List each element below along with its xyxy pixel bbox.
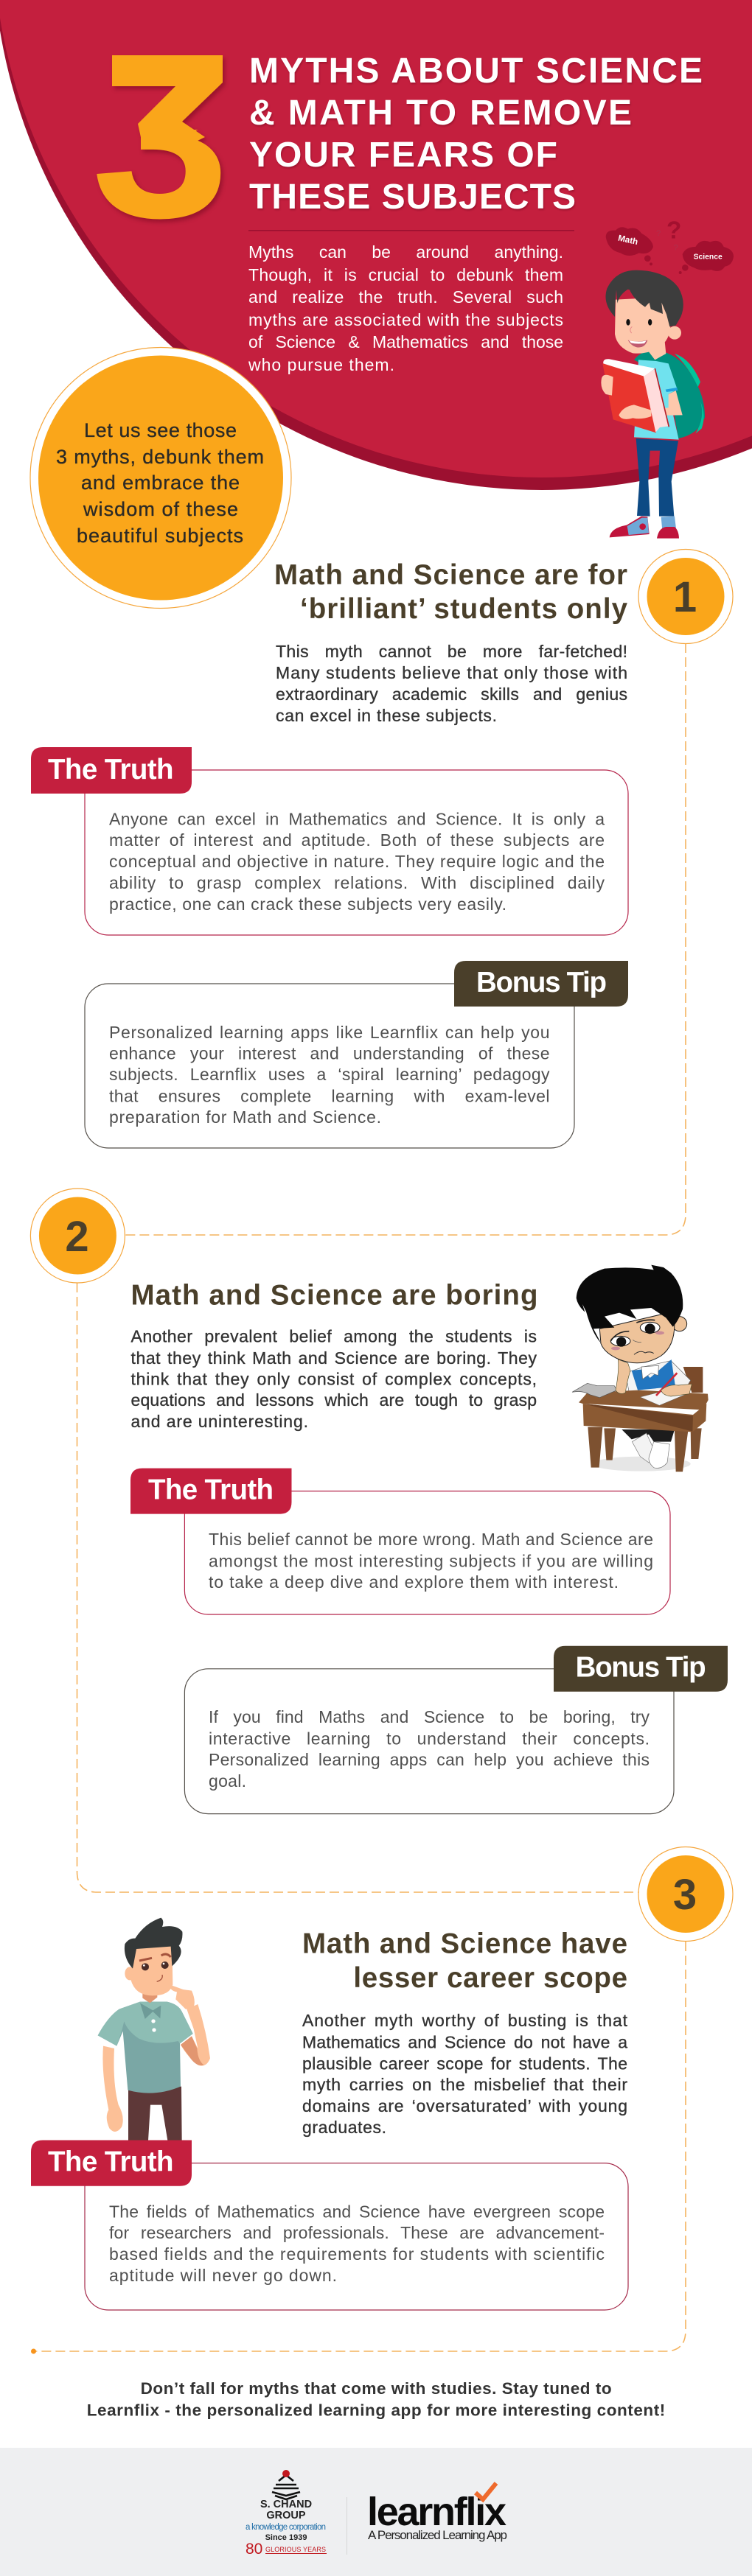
text: bonus 1: Personalized learning apps like Learnflix can help you <box>109 1023 550 1042</box>
heading: myth 2: Math and Science are boring <box>131 1279 538 1312</box>
backpack <box>634 350 705 438</box>
text: bonus 1: that ensures complete learning with exam-level <box>109 1086 550 1105</box>
text: truth 3: aptitude will never go down. <box>109 2266 337 2285</box>
t-shirt <box>634 360 679 440</box>
big number 3 <box>97 55 227 224</box>
heading: myth 3: lesser career scope <box>353 1962 627 1994</box>
text: truth 2: amongst the most interesting subjects if you are willing <box>209 1551 653 1570</box>
book <box>602 363 656 433</box>
closing text <box>87 2379 665 2419</box>
text: bonus 1: subjects. Learnflix uses a ‘spiral learning’ pedagogy <box>109 1065 550 1084</box>
text: bonus 2: Personalized learning apps can help you achieve this <box>209 1750 650 1769</box>
intro paragraph: myths are associated with the subjects <box>248 310 563 329</box>
tag: the truth: The Truth <box>48 2146 174 2178</box>
heading: myth 3 <box>302 1928 627 1994</box>
title: & MATH TO REMOVE <box>249 94 632 133</box>
paragraph: myth 2: think that they only consist of complex concepts, <box>131 1370 537 1389</box>
face details <box>626 319 630 326</box>
text: truth 2 <box>209 1530 653 1592</box>
question marks: ? <box>656 229 661 238</box>
jeans <box>636 438 678 517</box>
logo: S. Chand Group: 80 <box>246 2541 262 2558</box>
badge: number 2: 2 <box>65 1213 89 1261</box>
tag: bonus tip: Bonus Tip <box>476 967 607 998</box>
text: truth 1: matter of interest and aptitude. Both of these subjects are <box>109 830 605 850</box>
logo: learnflix: A Personalized Learning App <box>368 2528 507 2542</box>
text: truth 3: for researchers and professionals. These are advancement- <box>109 2223 605 2242</box>
tag: the truth <box>130 1469 292 1514</box>
head <box>672 1317 687 1331</box>
text: bonus 1: enhance your interest and understanding of these <box>109 1043 550 1063</box>
tag: bonus tip: Bonus Tip <box>576 1652 706 1684</box>
neck <box>142 1992 157 2003</box>
logo: learnflix: learnflix <box>367 2490 506 2534</box>
paragraph: myth 1: This myth cannot be more far-fetched! <box>276 642 627 661</box>
legs and socks <box>622 1429 675 1442</box>
thought cloud: Math <box>606 227 653 265</box>
paragraph: myth 3: Another myth worthy of busting is that <box>302 2011 628 2030</box>
text: truth 1: Anyone can excel in Mathematics and Science. It is only a <box>109 809 605 828</box>
icon: book stack <box>272 2470 300 2499</box>
ear and face <box>668 326 681 340</box>
hair <box>605 270 683 326</box>
hands <box>601 375 613 396</box>
text: truth 1 <box>109 809 605 914</box>
chair <box>683 1367 703 1393</box>
paragraph: myth 2 <box>131 1327 537 1431</box>
paragraph: myth 3: domains are ‘oversaturated’ with young <box>302 2096 627 2115</box>
eyes and brows <box>142 1963 149 1970</box>
tag: bonus tip <box>554 1646 728 1692</box>
callout: orange circle: Let us see those <box>84 419 237 441</box>
hero red circle <box>0 0 752 490</box>
hand <box>170 1984 195 2009</box>
illustration: bored boy at desk <box>572 1265 709 1471</box>
text: bonus 2: If you find Maths and Science to be boring, try <box>209 1707 650 1726</box>
callout: orange circle: and embrace the <box>81 472 240 494</box>
hair <box>577 1265 683 1343</box>
logo: S. Chand Group: GLORIOUS YEARS <box>265 2546 326 2553</box>
badge: number 3: 3 <box>673 1871 697 1919</box>
hair <box>125 1918 182 1969</box>
panel: bonus tip 1 <box>85 961 628 1148</box>
title: YOUR FEARS OF <box>249 136 557 175</box>
intro paragraph: Though, it is crucial to debunk them <box>248 265 563 284</box>
question marks: ? <box>666 217 681 244</box>
text: bonus 2 <box>209 1707 650 1791</box>
paragraph: myth 3: Mathematics and Science do not have a <box>302 2032 627 2051</box>
paragraph: myth 3: graduates. <box>302 2118 386 2137</box>
text: truth 3: The fields of Mathematics and Science have evergreen scope <box>109 2202 605 2221</box>
panel: the truth 3 <box>31 2140 628 2310</box>
paragraph: myth 2: and are uninteresting. <box>131 1412 308 1431</box>
callout: orange circle <box>30 348 291 609</box>
big number 3: 3 <box>91 10 229 265</box>
tag: bonus tip <box>454 961 628 1007</box>
intro paragraph: of Science & Mathematics and those <box>248 332 563 351</box>
arm under chin <box>616 1359 630 1393</box>
paragraph: myth 1 <box>276 642 627 725</box>
text: truth 3 <box>109 2202 605 2285</box>
ear <box>125 1967 135 1980</box>
paragraph: myth 3: myth carries on the misbelief that their <box>302 2075 627 2094</box>
text: truth 1: practice, one can crack these subjects very easily. <box>109 895 506 914</box>
closing text: Don’t fall for myths that come with studies. Stay tuned to <box>141 2379 612 2398</box>
text: truth 2: to take a deep dive and explore them with interest. <box>209 1572 619 1592</box>
paragraph: myth 1: can excel in these subjects. <box>276 706 497 725</box>
trousers <box>128 2087 182 2141</box>
title: THESE SUBJECTS <box>249 178 576 217</box>
paragraph: myth 1: Many students believe that only those with <box>276 663 627 682</box>
badge: number 1: 1 <box>673 573 697 621</box>
footer band <box>0 2448 752 2576</box>
thought cloud: Science <box>679 241 734 274</box>
paper and pencil <box>640 1391 685 1405</box>
paragraph: myth 3: plausible career scope for students. The <box>302 2054 627 2073</box>
connector: dashed timeline <box>31 643 686 2353</box>
paragraph: myth 2: Another prevalent belief among the students is <box>131 1327 537 1346</box>
intro paragraph: who pursue them. <box>248 355 394 374</box>
left arm <box>102 2046 123 2132</box>
callout: orange circle: beautiful subjects <box>77 525 243 547</box>
text: bonus 1 <box>109 1023 550 1127</box>
text: truth 1: conceptual and objective in nature. They require logic and the <box>109 852 605 871</box>
thought cloud: Science: Science <box>694 253 723 261</box>
intro paragraph <box>248 242 563 374</box>
logo: S. Chand Group <box>246 2470 327 2558</box>
logo: S. Chand Group: a knowledge corporation <box>246 2523 326 2532</box>
arm <box>650 391 683 416</box>
text: bonus 2: interactive learning to understand their concepts. <box>209 1729 650 1748</box>
tag: the truth: The Truth <box>48 754 174 785</box>
panel: the truth 2 <box>130 1469 670 1614</box>
paragraph: myth 1: extraordinary academic skills and genius <box>276 685 627 704</box>
torso <box>625 1361 691 1393</box>
paragraph: myth 2: that they think Math and Science are boring. They <box>131 1348 537 1368</box>
text: bonus 1: preparation for Math and Science. <box>109 1107 381 1127</box>
desk <box>579 1390 709 1410</box>
heading: myth 1: Math and Science are for <box>274 559 627 591</box>
badge: number 2 <box>30 1189 125 1283</box>
thought cloud: Math: Math <box>617 234 638 247</box>
shirt <box>98 2002 193 2093</box>
logo: S. Chand Group: S. CHAND <box>260 2499 312 2510</box>
paragraph: myth 2: equations and lessons which are tough to grasp <box>131 1390 537 1410</box>
badge: number 3 <box>638 1847 733 1941</box>
title: MYTHS ABOUT SCIENCE <box>249 52 703 91</box>
paragraph: myth 3 <box>302 2011 628 2137</box>
panel: bonus tip 2 <box>184 1646 728 1814</box>
text: truth 1: ability to grasp complex relations. With disciplined daily <box>109 873 605 892</box>
illustration: thinking man <box>98 1918 210 2141</box>
face <box>130 1945 173 1995</box>
floor shadow <box>592 1457 691 1471</box>
right arm <box>181 2004 210 2066</box>
illustration: boy with book and backpack <box>601 217 734 539</box>
text: truth 2: This belief cannot be more wrong. Math and Science are <box>209 1530 653 1549</box>
shoes <box>610 517 650 537</box>
logo: S. Chand Group: Since 1939 <box>265 2533 307 2542</box>
tag: the truth <box>31 747 192 794</box>
badge: number 1 <box>638 550 733 644</box>
text: bonus 2: goal. <box>209 1771 246 1791</box>
title <box>249 52 703 217</box>
eyes <box>640 1322 660 1333</box>
closing text: Learnflix - the personalized learning app for more interesting content! <box>87 2401 665 2419</box>
question marks: ? <box>673 243 678 252</box>
heading: myth 3: Math and Science have <box>302 1928 627 1960</box>
intro paragraph: Myths can be around anything. <box>248 242 563 262</box>
tag: the truth: The Truth <box>148 1474 274 1506</box>
desk legs <box>588 1427 702 1471</box>
text: truth 3: based fields and the requirements for students with scientific <box>109 2244 605 2264</box>
callout: orange circle: 3 myths, debunk them <box>56 446 264 468</box>
heading: myth 1: ‘brilliant’ students only <box>300 593 628 625</box>
book <box>572 1383 617 1398</box>
logo: S. Chand Group: GROUP <box>266 2510 306 2521</box>
callout: orange circle: wisdom of these <box>83 498 238 520</box>
tag: the truth <box>31 2140 192 2186</box>
heading: myth 1 <box>274 559 628 625</box>
question marks <box>656 217 681 252</box>
intro paragraph: and realize the truth. Several such <box>248 287 563 307</box>
panel: the truth 1 <box>31 747 628 935</box>
